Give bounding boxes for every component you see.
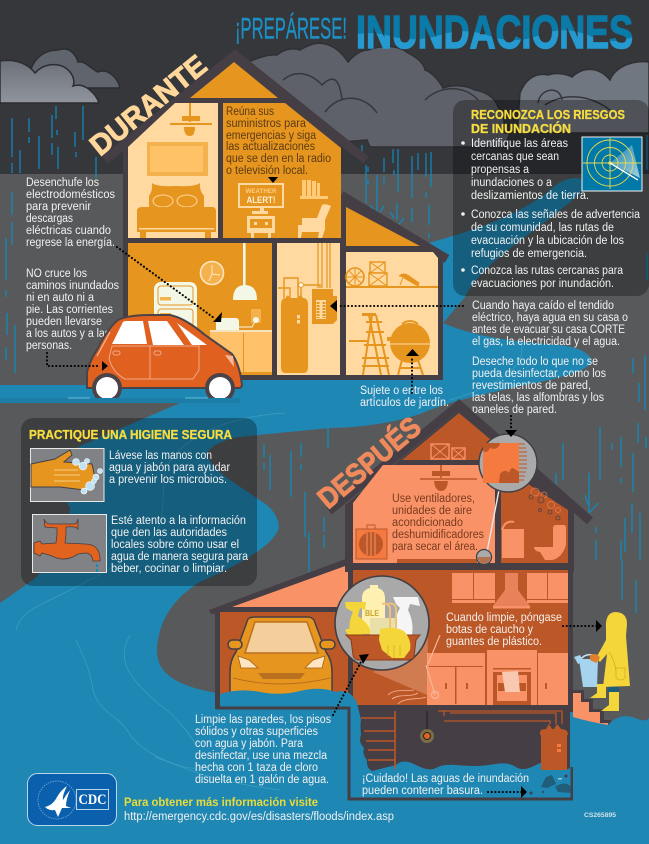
panel heading: DE INUNDACIÓN [471, 121, 571, 136]
icon: faucet [32, 514, 106, 572]
text: protective gear: guantes de plástico. [446, 636, 542, 648]
text: protective gear: Cuando limpie, póngase [446, 612, 562, 624]
text: power off: antes de evacuar su casa CORTE [472, 324, 625, 336]
panel: safe hygiene [21, 418, 257, 586]
text: do not cross: NO cruce los [26, 268, 87, 280]
logo: CDC: CDC [78, 792, 106, 808]
hygiene text 2: Esté atento a la información [111, 515, 246, 527]
text: supplies: Reúna sus [226, 106, 274, 118]
garage room [215, 612, 353, 709]
text: protective gear [446, 612, 562, 648]
text: unplug appliances: Desenchufe los [26, 177, 99, 189]
text: supplies: emergencias y siga [226, 130, 317, 142]
living room: WEATHER [246, 188, 277, 195]
text: discard [472, 356, 606, 416]
bullet list: evacuación y la ubicación de los [471, 235, 624, 247]
text: do not cross: a los autos y a las [26, 328, 110, 340]
rain [6, 106, 647, 613]
text: supplies [226, 106, 331, 177]
panel heading: RECONOZCA LOS RIESGOS [471, 108, 625, 122]
hygiene text 2: beber, cocinar o limpiar. [111, 563, 227, 575]
text: supplies: o televisión local. [226, 165, 308, 177]
utility room [277, 243, 340, 375]
attic [190, 62, 278, 98]
text: power off: Cuando haya caído el tendido [472, 300, 614, 312]
text: yard items: Sujete o entre los [360, 385, 443, 397]
text: do not cross [26, 268, 119, 352]
bullet list [461, 138, 641, 290]
bullet list: refugios de emergencia. [471, 248, 587, 260]
text: yard items [360, 385, 449, 409]
bullet list: cercanas que sean [471, 151, 559, 163]
text: unplug appliances: eléctricas cuando [26, 225, 111, 237]
bottom water [217, 693, 573, 844]
connector line to magnifier [487, 490, 499, 552]
hygiene text 2 [111, 515, 249, 575]
text: discard: revestimientos de pared, [472, 380, 591, 392]
text: yard items: artículos de jardín. [360, 397, 449, 409]
text: discard: pueda desinfectar, como los [472, 368, 606, 380]
text: supplies: las actualizaciones [226, 141, 315, 153]
hygiene text 2: que den las autoridades [111, 527, 227, 539]
magnifier: cleaning supplies [335, 576, 429, 670]
hygiene text 1: Lávese las manos con [109, 450, 212, 462]
icon: person in raincoat [574, 612, 630, 711]
more information: Para obtener más información visite [124, 797, 318, 809]
text: disinfecting: Limpie las paredes, los pisos [195, 714, 331, 726]
house structure [123, 55, 447, 380]
text: do not cross: pueden llevarse [26, 316, 102, 328]
floating debris [530, 774, 571, 794]
text: do not cross: ni en auto ni a [26, 292, 95, 304]
water right of house [573, 715, 649, 844]
more information: http://emergency.cdc.gov/es/disasters/floods/index.asp [124, 811, 394, 823]
bullet list: Identifique las áreas [471, 138, 568, 150]
bullet list: Conozca las rutas cercanas para [471, 265, 624, 277]
water currents [16, 340, 522, 790]
house: después [209, 405, 590, 799]
house: durante [105, 55, 447, 380]
text: disinfecting: desinfectar, use una mezcla [195, 750, 328, 762]
text: debris warning [362, 773, 529, 797]
hygiene text 2: agua de manera segura para [111, 551, 249, 563]
bullet list: de su comunidad, las rutas de [471, 222, 614, 234]
basement [357, 705, 570, 771]
text: ventilation: para secar el área. [392, 541, 478, 553]
text: unplug appliances [26, 177, 115, 249]
dotted arrows [47, 177, 602, 798]
garage [346, 252, 438, 375]
upper structure [345, 411, 574, 572]
hygiene text 1: a prevenir los microbios. [109, 474, 227, 486]
bullet list: deslizamientos de tierra. [471, 190, 589, 202]
icon: yellow car [228, 617, 335, 696]
text: unplug appliances: para prevenir [26, 201, 91, 213]
hygiene heading: PRACTIQUE UNA HIGIENE SEGURA [29, 428, 232, 442]
panel heading [471, 108, 625, 136]
text: supplies: suministros para [226, 118, 307, 130]
text: power off [472, 300, 628, 348]
text: unplug appliances: regrese la energía. [26, 237, 115, 249]
text: ventilation: unidades de aire [392, 505, 472, 517]
text: unplug appliances: descargas [26, 213, 73, 225]
publication code: CS265895 [584, 812, 616, 819]
water in front of car [0, 398, 240, 403]
living room: ALERT! [246, 195, 276, 205]
text: debris warning: pueden contener basura. [362, 785, 483, 797]
icon: radar [582, 137, 642, 191]
text: ventilation [392, 493, 484, 553]
bullet list: inundaciones o a [471, 177, 553, 189]
bullet list: evacuaciones por inundación. [471, 278, 614, 290]
text: disinfecting: hecha con 1 taza de cloro [195, 762, 318, 774]
text: power off: eléctrico, haya agua en su casa o [472, 312, 628, 324]
stairs [573, 690, 611, 726]
heading: durante: DURANTE [84, 49, 213, 162]
more information [124, 797, 394, 823]
house bottom outline [218, 695, 572, 799]
water over garage [220, 689, 361, 720]
text: ventilation: Use ventiladores, [392, 493, 475, 505]
clouds left [0, 49, 120, 103]
text: debris warning: ¡Cuidado! Las aguas de inundación [362, 773, 529, 785]
title: prepárese: ¡PREPÁRESE! [235, 12, 347, 46]
text: discard: Deseche todo lo que no se [472, 356, 598, 368]
hygiene text 1: agua y jabón para ayudar [109, 462, 230, 474]
bathroom [501, 480, 568, 563]
garage attic [346, 207, 420, 246]
hygiene text 2: locales sobre cómo usar el [111, 539, 239, 551]
text: discard: las telas, las alfombras y los [472, 392, 604, 404]
magnifier: small [476, 550, 492, 564]
text: do not cross: pie. Las corrientes [26, 304, 113, 316]
main floor [348, 565, 573, 712]
bullet list: propensas a [471, 164, 530, 176]
bedroom [128, 103, 218, 238]
clouds right [240, 43, 649, 150]
text: ventilation: acondicionado [392, 517, 463, 529]
text: disinfecting: disuelta en 1 galón de agua. [195, 774, 329, 786]
heading: después: DESPUÉS [311, 410, 427, 515]
upper room [353, 465, 495, 563]
living room [223, 103, 341, 238]
text: supplies: que se den en la radio [226, 153, 331, 165]
text: discard: paneles de pared. [472, 404, 557, 416]
text: do not cross: personas. [26, 340, 72, 352]
kitchen [128, 243, 272, 375]
text: disinfecting [195, 714, 331, 786]
text: ventilation: deshumidificadores [392, 529, 484, 541]
roof [105, 55, 447, 259]
text: disinfecting: con agua y jabón. Para [195, 738, 304, 750]
text: protective gear: botas de caucho y [446, 624, 533, 636]
text: do not cross: caminos inundados [26, 280, 119, 292]
garage roof [209, 558, 353, 614]
text: power off: el gas, la electricidad y el agua. [472, 336, 620, 348]
hygiene text 1 [109, 450, 230, 486]
magnifier: cleaning supplies: BLE [365, 609, 380, 618]
icon: washing hands [30, 448, 104, 502]
text: unplug appliances: electrodomésticos [26, 189, 115, 201]
panel: recognize risks [453, 100, 649, 296]
river [0, 178, 592, 844]
icon: orange car [87, 315, 242, 403]
attic with boxes [402, 413, 515, 460]
roof [329, 405, 590, 521]
magnifier: mold [479, 434, 537, 492]
logo: CDC [28, 774, 116, 826]
text: disinfecting: sólidos y otras superficies [195, 726, 318, 738]
